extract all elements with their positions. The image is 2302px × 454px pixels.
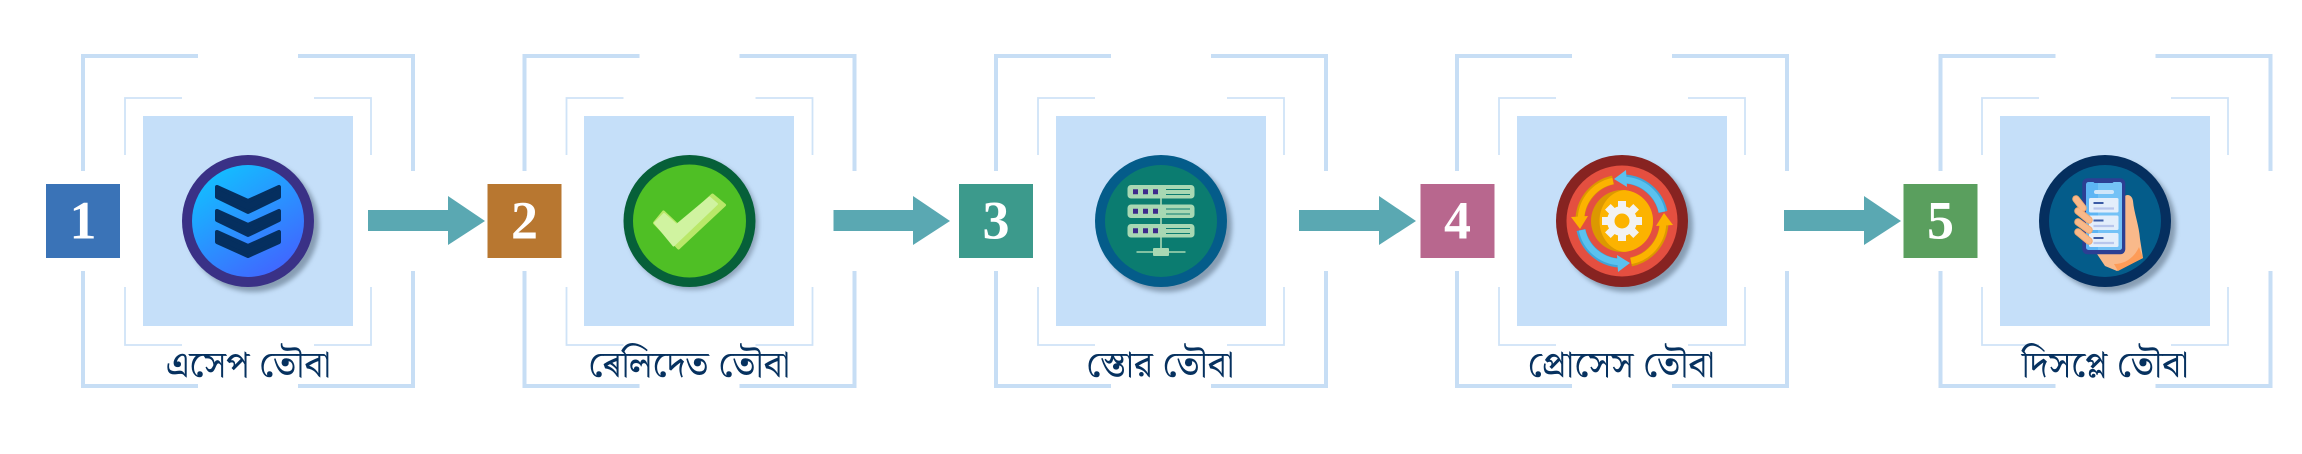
step 5 label: দিসপ্লে তৌবা [2020, 337, 2188, 396]
step 5 number badge [1904, 184, 1978, 258]
step 1 number badge: 1 [70, 190, 96, 250]
step 4 label: প্রোসেস তৌবা [1528, 337, 1714, 396]
arrow 4 to 5 [1784, 196, 1901, 245]
icon: layered chevrons [182, 155, 319, 292]
step 1: step [46, 56, 413, 396]
icon: server rack [1095, 155, 1232, 292]
step 4 number badge: 4 [1444, 190, 1471, 250]
step 3 panel [1056, 116, 1266, 326]
pipeline diagram [46, 54, 2272, 388]
step 2 panel [584, 116, 794, 326]
step 1 label: এসেপ তৌবা [165, 337, 331, 396]
step 4 panel [1517, 116, 1727, 326]
icon: gear with cycle arrows [1556, 155, 1693, 292]
step 3: store [959, 56, 1326, 396]
step 1 number badge [46, 184, 120, 258]
icon: hand holding phone [2039, 155, 2176, 292]
step 4: process [1420, 56, 1787, 396]
arrow 1 to 2 [368, 196, 485, 245]
step 2 label: ৰেলিদেত তৌবা [588, 337, 790, 396]
step 5: display [1904, 56, 2270, 396]
step 5 number badge: 5 [1927, 190, 1954, 250]
icon: check mark [624, 155, 758, 290]
arrow 2 to 3 [834, 196, 950, 245]
arrow 3 to 4 [1299, 196, 1416, 245]
step 3 number badge: 3 [982, 190, 1010, 250]
step 2 number badge [488, 184, 562, 258]
step 2: validate [488, 56, 854, 396]
step 3 label: স্তোর তৌবা [1086, 337, 1234, 396]
step 1 panel [143, 116, 353, 326]
step 5 panel [2000, 116, 2210, 326]
step 2 number badge: 2 [511, 190, 538, 250]
step 3 number badge [959, 184, 1033, 258]
step 4 number badge [1420, 184, 1494, 258]
